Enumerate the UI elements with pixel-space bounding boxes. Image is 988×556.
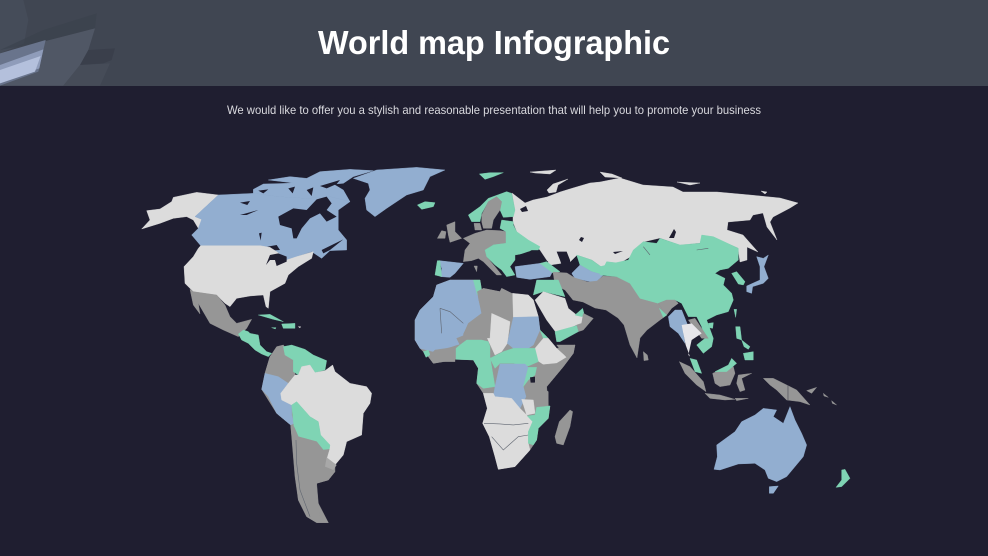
- Great Lakes: [266, 253, 287, 266]
- Black Sea: [518, 252, 548, 263]
- Tasmania: [769, 486, 778, 493]
- Iran, Afghanistan, Pakistan and India: [553, 272, 667, 358]
- Western and Central Europe: [463, 230, 506, 275]
- Yemen: [555, 326, 578, 342]
- Sierra Leone: [423, 350, 430, 357]
- Argentina and Chile: [291, 425, 335, 523]
- Pacific islands: [807, 387, 837, 405]
- Turkmenistan: [572, 265, 603, 282]
- Alaska: [142, 192, 218, 230]
- New Zealand: [836, 469, 850, 487]
- header band: [0, 0, 988, 86]
- Oman: [577, 313, 593, 332]
- Myanmar: [668, 310, 688, 343]
- Balkans: [485, 243, 515, 277]
- Northeast India: [658, 300, 678, 315]
- Mozambique: [527, 406, 550, 445]
- Brazil: [281, 365, 372, 465]
- Libya: [477, 288, 513, 322]
- Somalia and Kenya: [537, 345, 575, 387]
- continent base: [262, 345, 335, 523]
- Tanzania: [526, 383, 548, 407]
- Java and lesser islands: [705, 393, 748, 401]
- Ethiopia: [535, 338, 567, 367]
- Tunisia: [473, 280, 482, 295]
- United States: [184, 246, 313, 308]
- Portugal: [435, 261, 442, 277]
- Sudan: [507, 317, 540, 348]
- Central America: [238, 330, 272, 357]
- Thailand: [682, 323, 702, 357]
- Mexico: [190, 289, 252, 337]
- Bolivia and Paraguay: [292, 402, 330, 450]
- Southeast Asia and Oceania: [643, 310, 850, 493]
- Vietnam: [695, 313, 713, 353]
- Caribbean: [258, 314, 301, 329]
- Iraq and Levant: [533, 280, 565, 297]
- Canada: [192, 169, 373, 260]
- South America: [238, 330, 372, 523]
- Southern Africa: [483, 393, 533, 469]
- Australia: [714, 407, 807, 482]
- Taiwan: [734, 309, 737, 317]
- UAE: [575, 308, 584, 317]
- Colombia: [265, 345, 295, 383]
- Nigeria, Cameroon, Gabon: [456, 340, 495, 388]
- decorative petal graphic: [0, 0, 115, 86]
- East Asia: [600, 235, 768, 328]
- Sulawesi: [737, 373, 752, 392]
- Venezuela and Guianas: [283, 345, 327, 375]
- continent base: [415, 280, 575, 469]
- Caspian Sea: [557, 252, 573, 278]
- Denmark: [474, 223, 482, 230]
- Bangladesh: [659, 308, 667, 317]
- Sri Lanka: [643, 352, 648, 361]
- Saudi Arabia: [535, 292, 583, 333]
- Philippines: [736, 327, 753, 360]
- Borneo: [713, 358, 737, 387]
- Peru and Ecuador: [262, 373, 294, 425]
- Lake Victoria: [530, 377, 535, 383]
- subtitle: We would like to offer you a stylish and reasonable presentation that will help you to promote your business: [227, 103, 761, 117]
- Norway and Finland: [468, 192, 515, 222]
- Russia and Kazakhstan: [512, 170, 798, 268]
- Sumatra: [679, 362, 706, 392]
- Uruguay: [325, 457, 337, 470]
- Greenland: [353, 167, 445, 217]
- Caucasus: [540, 262, 560, 273]
- Burkina Faso: [457, 335, 467, 345]
- CAR and South Sudan: [490, 348, 538, 368]
- Madagascar: [555, 410, 573, 445]
- Japan: [747, 255, 768, 293]
- Central Asia: [577, 255, 620, 277]
- Northwest Africa: [415, 280, 482, 352]
- Chad: [487, 313, 510, 355]
- Laos and Cambodia: [688, 318, 708, 338]
- Eritrea: [540, 330, 548, 338]
- DR Congo: [493, 364, 528, 408]
- Niger: [463, 313, 492, 340]
- Eastern Europe: [493, 220, 540, 257]
- Africa and Arabia: [415, 280, 593, 469]
- Korea: [732, 272, 745, 285]
- Svalbard: [479, 173, 503, 179]
- New Guinea: [763, 378, 810, 405]
- UK and Ireland: [437, 222, 462, 242]
- China: [600, 235, 738, 323]
- Zambia and Malawi: [522, 399, 535, 415]
- world map: [142, 167, 850, 523]
- Sweden: [482, 197, 502, 228]
- Europe and Western Asia: [417, 173, 620, 282]
- Ivory Coast and Ghana: [428, 347, 455, 363]
- Hainan: [708, 323, 713, 328]
- Turkey: [515, 263, 553, 279]
- Malaysia peninsula: [690, 358, 702, 373]
- North America: [142, 167, 445, 337]
- Uganda: [523, 367, 537, 387]
- title: World map Infographic: [318, 25, 670, 62]
- Egypt: [513, 293, 538, 317]
- Sardinia: [474, 266, 477, 272]
- Iceland: [417, 202, 435, 209]
- Spain: [439, 261, 463, 277]
